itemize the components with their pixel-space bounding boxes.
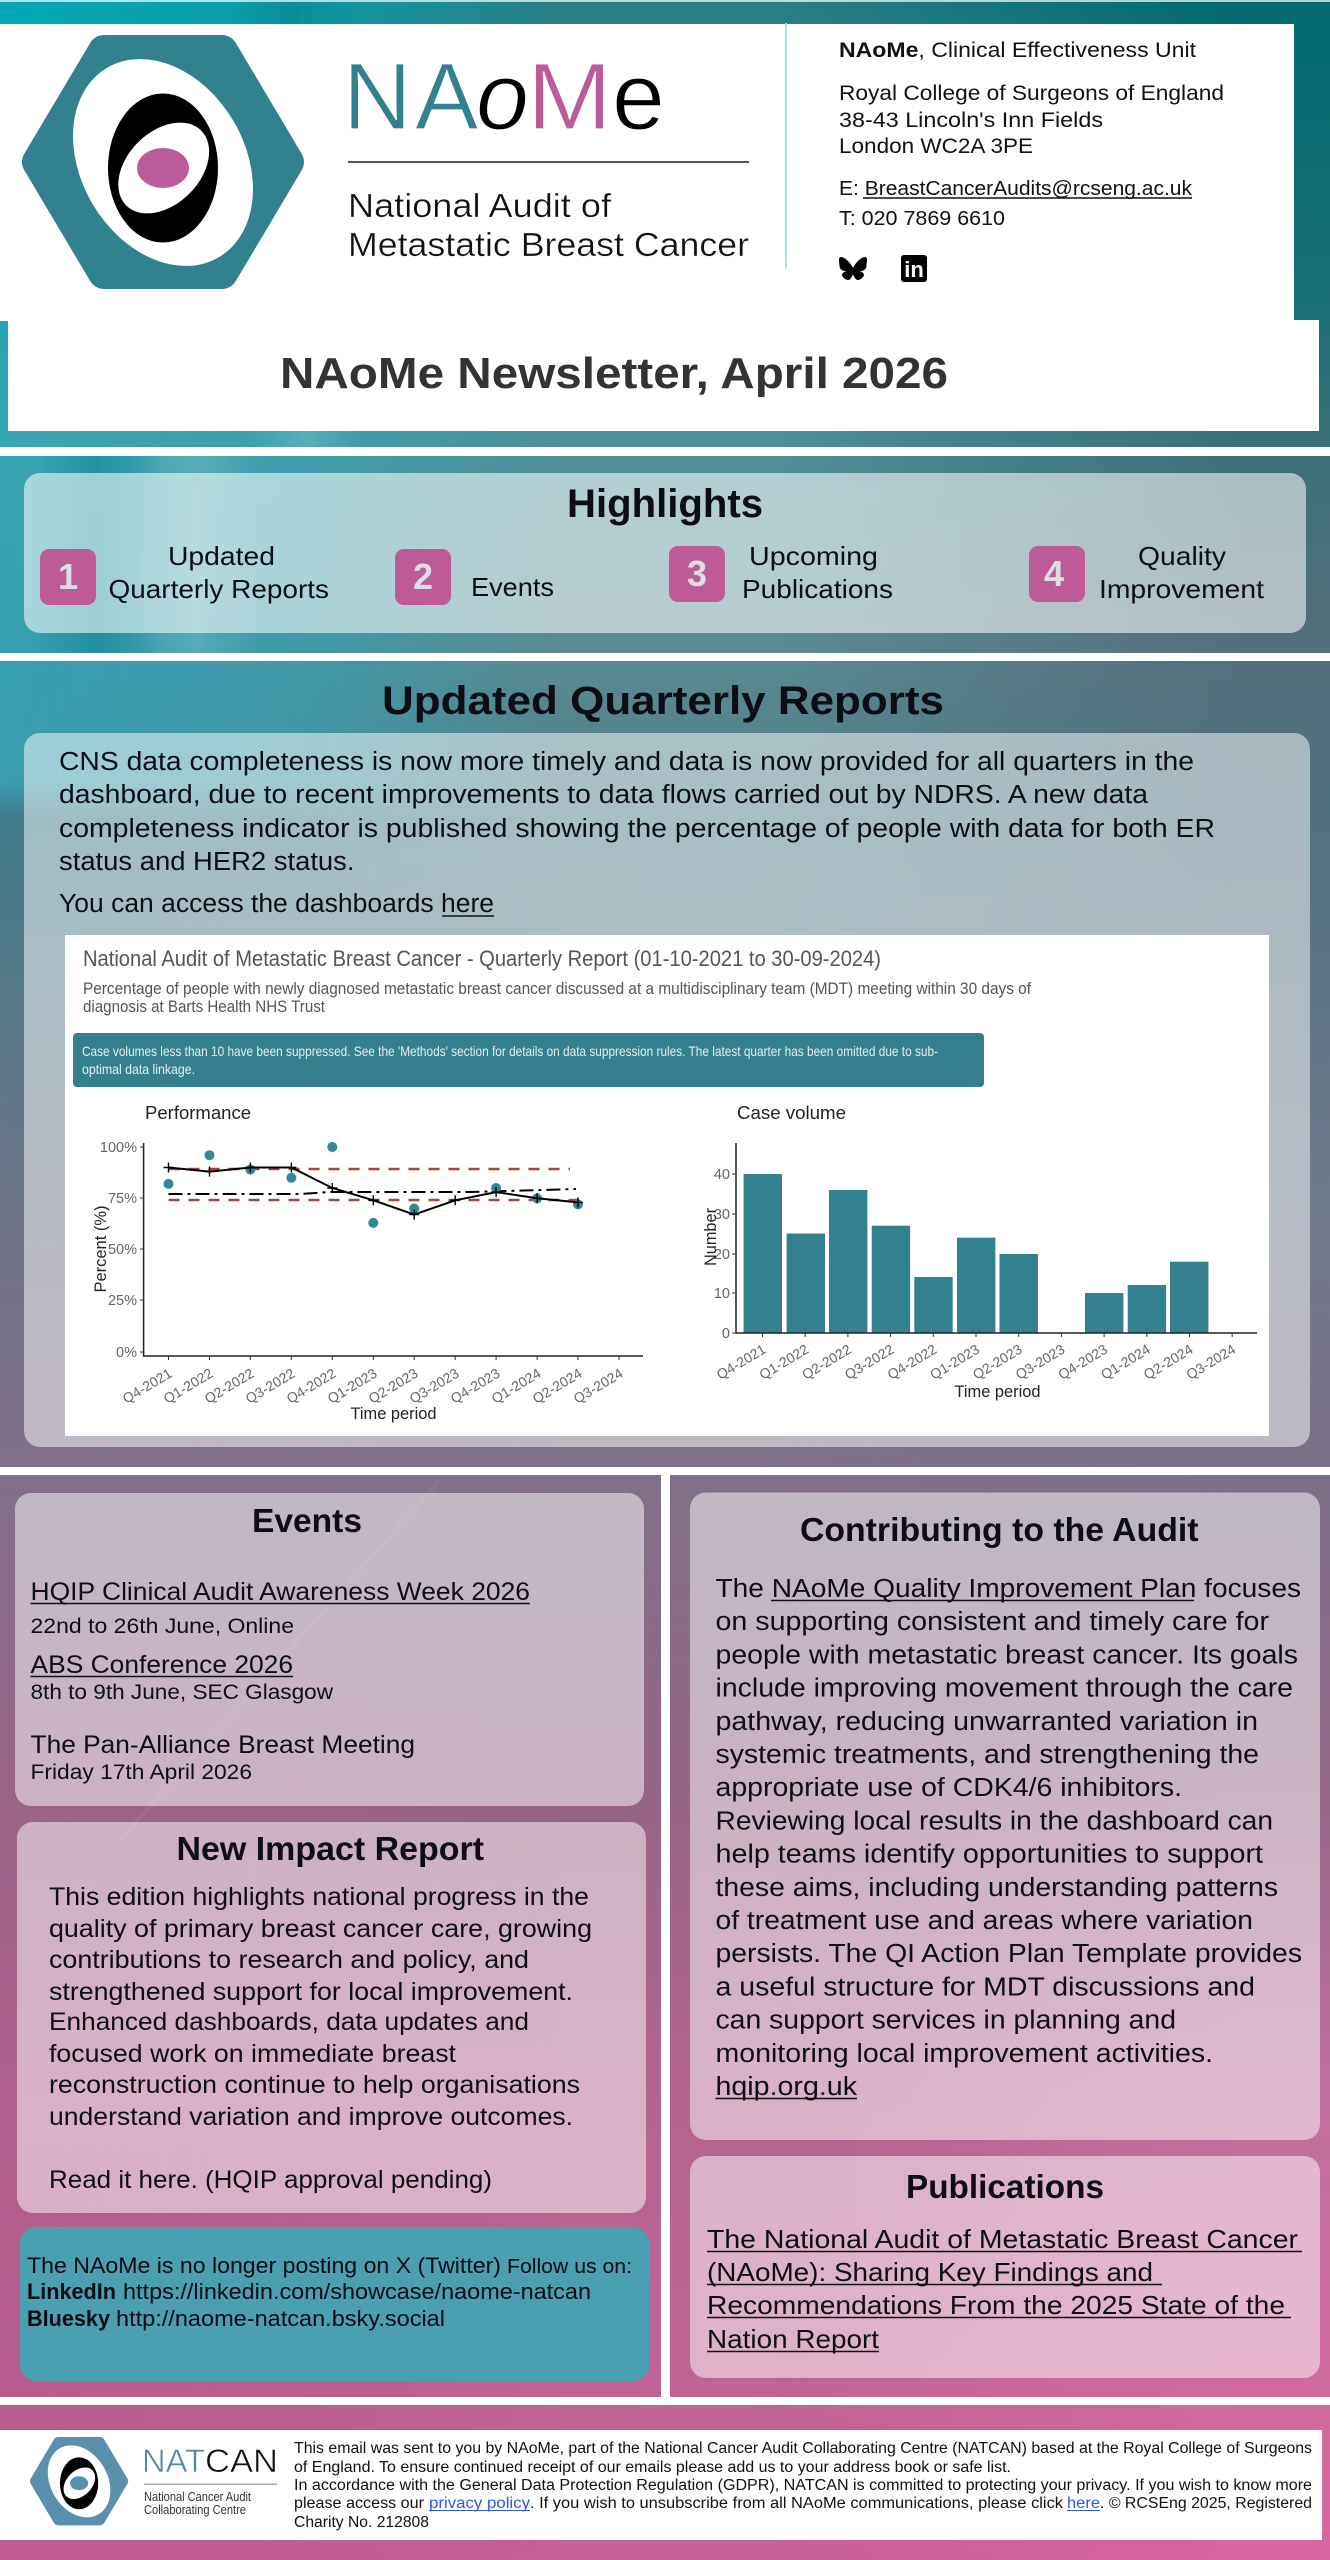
callout: social media notice: Bluesky — [27, 2306, 111, 2331]
line chart: performance: Q2-2024 — [530, 1365, 585, 1407]
wordmark: NATCAN: NAT — [142, 2443, 205, 2479]
text: contributing body: monitoring local improvement activities. — [716, 2040, 1213, 2068]
text: footer legal notice: please access our — [294, 2495, 424, 2512]
callout: social media notice: The NAoMe is no longer posting on X (Twitter) — [27, 2253, 501, 2278]
title banner: NAoMe Newsletter, April 2026 — [280, 349, 948, 398]
bar chart: case volume: 20 — [714, 1247, 730, 1263]
bar chart: case volume: Q3-2022 — [842, 1341, 897, 1383]
text: quarterly reports intro: status and HER2 status. — [59, 848, 354, 876]
text: contributing body: pathway, reducing unwarranted variation in — [716, 1708, 1258, 1736]
line chart: performance: 0% — [116, 1345, 137, 1361]
panel: contributing to the audit — [690, 1492, 1320, 2140]
line chart: performance: Q4-2022 — [284, 1365, 339, 1407]
highlight 4 — [1029, 541, 1265, 604]
logo subtitle — [348, 161, 749, 263]
dashboard title: Percentage of people with newly diagnosed metastatic breast cancer discussed at a multidisciplinary team (MDT) meeting within 30 days of — [83, 979, 1031, 998]
callout: suppression note: Case volumes less than 10 have been suppressed. See the 'Methods' section for details on data suppression rules. The latest quarter has been omitted due to sub- — [82, 1043, 938, 1059]
text: contributing body: Reviewing local results in the dashboard can — [716, 1807, 1273, 1835]
text: footer legal notice — [294, 2440, 1312, 2531]
highlight 2: 2 — [413, 556, 433, 597]
bar chart: case volume: 30 — [714, 1207, 730, 1223]
callout: social media notice: Follow us on: — [507, 2256, 632, 2278]
text: quarterly reports intro: dashboard, due to recent improvements to data flows carried out by NDRS. A new data — [59, 781, 1149, 809]
contact details: T: 020 7869 6610 — [839, 208, 1005, 230]
text: contributing body: appropriate use of CDK4/6 inhibitors. — [716, 1774, 1182, 1802]
text: contributing body: systemic treatments, and strengthening the — [716, 1741, 1259, 1769]
line chart: performance: Q3-2024 — [571, 1365, 626, 1407]
line chart: performance: Q2-2022 — [202, 1365, 257, 1407]
callout: social media notice: LinkedIn — [27, 2279, 116, 2304]
text: quarterly reports intro: You can access the dashboards here — [59, 890, 494, 918]
wordmark: NAoMe: e — [612, 44, 665, 150]
wordmark: NAoMe — [343, 44, 665, 150]
line chart: performance: 100% — [100, 1140, 137, 1156]
bar chart: case volume — [702, 1103, 1257, 1401]
wordmark: NATCAN — [142, 2443, 278, 2479]
text: footer legal notice: . © RCSEng 2025, Registered — [1100, 2495, 1312, 2512]
bar chart: case volume: Q4-2023 — [1055, 1341, 1110, 1383]
text: publication link: The National Audit of Metastatic Breast Cancer — [707, 2224, 1298, 2254]
icon: Bluesky — [839, 257, 867, 280]
line chart: performance: 50% — [108, 1242, 137, 1258]
text: contributing body: on supporting consistent and timely care for — [716, 1608, 1270, 1636]
heading: Events: Events — [252, 1502, 362, 1539]
heading: Publications: Publications — [906, 2168, 1104, 2205]
bar chart: case volume: 0 — [722, 1326, 730, 1342]
text: impact report body: Enhanced dashboards, data updates and — [49, 2008, 529, 2036]
panel: publications — [690, 2156, 1320, 2378]
dashboard screenshot — [65, 935, 1269, 1436]
heading: Highlights: Highlights — [567, 482, 763, 526]
heading: Updated Quarterly Reports: Updated Quarterly Reports — [382, 679, 944, 723]
text: publication link: Nation Report — [707, 2324, 880, 2354]
bar chart: case volume: Q1-2023 — [927, 1341, 982, 1383]
highlight 1: Quarterly Reports — [108, 574, 329, 604]
text: footer legal notice: . If you wish to unsubscribe from all NAoMe communications, please click — [530, 2495, 1063, 2512]
bar chart: case volume: Q1-2022 — [756, 1341, 811, 1383]
dashboard title — [83, 946, 1031, 1016]
highlight 2 — [395, 549, 554, 605]
line chart: performance: Q3-2022 — [243, 1365, 298, 1407]
text: footer legal notice: This email was sent to you by NAoMe, part of the National Cancer Audit Collaborating Centre (NATCAN) based at the Royal College of Surgeons — [294, 2440, 1312, 2457]
event: Pan-Alliance: Friday 17th April 2026 — [30, 1761, 252, 1784]
text: impact report body: This edition highlights national progress in the — [49, 1883, 589, 1911]
bar chart: case volume: Q4-2022 — [884, 1341, 940, 1383]
bar chart: case volume: 40 — [714, 1167, 730, 1183]
header panel — [0, 23, 1294, 321]
highlight 4: Improvement — [1099, 574, 1265, 604]
text: contributing body: these aims, including understanding patterns — [716, 1874, 1278, 1902]
callout: social media notice: https://linkedin.com/showcase/naome-natcan — [123, 2279, 591, 2304]
text: impact report body: reconstruction continue to help organisations — [49, 2071, 580, 2099]
text: quarterly reports intro: completeness indicator is published showing the percentage of people with data for both ER — [59, 815, 1215, 843]
text: impact report body: quality of primary breast cancer care, growing — [49, 1915, 592, 1943]
text: contributing body: include improving movement through the care — [716, 1675, 1293, 1703]
panel: footer — [0, 2430, 1322, 2540]
title banner — [8, 320, 1319, 431]
bar chart: case volume: 10 — [714, 1286, 730, 1302]
panel: quarterly reports — [24, 733, 1310, 1447]
event: Pan-Alliance: The Pan-Alliance Breast Meeting — [30, 1731, 415, 1759]
text: contributing body: of treatment use and areas where variation — [716, 1907, 1253, 1935]
bar chart: case volume: Q1-2024 — [1098, 1341, 1153, 1383]
icon: NATCAN logo — [35, 2434, 123, 2529]
text: footer legal notice: here — [1067, 2495, 1100, 2512]
event: ABS: ABS Conference 2026 — [30, 1651, 293, 1679]
line chart: performance: Q1-2023 — [325, 1365, 380, 1407]
dashboard title: National Audit of Metastatic Breast Cancer - Quarterly Report (01-10-2021 to 30-09-2024) — [83, 946, 881, 971]
line chart: performance: Percent (%) — [92, 1206, 110, 1292]
text: contributing body: people with metastatic breast cancer. Its goals — [716, 1641, 1298, 1669]
highlight 2: Events — [471, 572, 554, 602]
wordmark: NAoMe: N — [343, 44, 412, 150]
wordmark: NAoMe: A — [415, 44, 479, 150]
contact details: 38-43 Lincoln's Inn Fields — [839, 109, 1103, 132]
line chart: performance: Time period — [350, 1405, 436, 1423]
line chart: performance: Q2-2023 — [366, 1365, 421, 1407]
highlight 1: Updated — [168, 541, 275, 571]
text: publication link: (NAoMe): Sharing Key Findings and — [707, 2257, 1153, 2287]
text: impact report body: understand variation and improve outcomes. — [49, 2103, 573, 2131]
highlight 3: Publications — [742, 574, 893, 604]
contact details: E: BreastCancerAudits@rcseng.ac.uk — [839, 178, 1193, 200]
text: contributing body: hqip.org.uk — [716, 2073, 857, 2101]
dashboard title: diagnosis at Barts Health NHS Trust — [83, 997, 325, 1016]
wordmark: NAoMe: o — [476, 44, 529, 150]
wordmark: NATCAN: CAN — [205, 2443, 278, 2479]
line chart: performance: 75% — [108, 1191, 137, 1207]
highlight 4: Quality — [1138, 541, 1226, 571]
bar chart: case volume: Q3-2024 — [1183, 1341, 1238, 1383]
line chart: performance: Q1-2022 — [161, 1365, 216, 1407]
text: publication link — [707, 2224, 1302, 2354]
highlight 3: 3 — [687, 553, 707, 594]
text: impact report body — [49, 1883, 592, 2194]
bar chart: case volume: Case volume — [737, 1103, 846, 1123]
line chart: performance: Q4-2021 — [120, 1365, 175, 1407]
text: impact report body: Read it here. (HQIP approval pending) — [49, 2166, 492, 2194]
line chart: performance — [92, 1103, 643, 1423]
logo subtitle: Metastatic Breast Cancer — [348, 226, 749, 263]
event: ABS: 8th to 9th June, SEC Glasgow — [30, 1681, 334, 1704]
contact details: NAoMe , Clinical Effectiveness Unit — [839, 39, 1196, 62]
highlight 3 — [669, 541, 893, 604]
text: contributing body — [716, 1575, 1302, 2101]
text: contributing body: The NAoMe Quality Improvement Plan focuses — [716, 1575, 1301, 1603]
line chart: performance: Performance — [145, 1103, 251, 1123]
callout: social media notice: http://naome-natcan.bsky.social — [116, 2306, 445, 2331]
text: quarterly reports intro — [59, 748, 1215, 918]
heading: New Impact Report: New Impact Report — [176, 1830, 484, 1867]
highlight 1: 1 — [58, 556, 78, 597]
text: contributing body: persists. The QI Action Plan Template provides — [716, 1940, 1302, 1968]
event: HQIP — [30, 1578, 530, 1638]
panel: events — [15, 1493, 644, 1806]
event: Pan-Alliance — [30, 1731, 415, 1784]
line chart: performance: Q3-2023 — [407, 1365, 462, 1407]
contact details — [839, 39, 1224, 230]
highlight 4: 4 — [1044, 553, 1064, 594]
icon: NAoMe logo — [37, 26, 289, 299]
logo subtitle: National Audit of — [348, 187, 612, 224]
event: ABS — [30, 1651, 334, 1704]
event: HQIP: HQIP Clinical Audit Awareness Week 2026 — [30, 1578, 530, 1606]
NATCAN subtitle: Collaborating Centre — [144, 2503, 246, 2517]
text: quarterly reports intro: CNS data completeness is now more timely and data is now provided for all quarters in the — [59, 748, 1194, 776]
highlight 1 — [40, 541, 329, 605]
highlight 3: Upcoming — [749, 541, 878, 571]
event: HQIP: 22nd to 26th June, Online — [30, 1615, 294, 1638]
bar chart: case volume: Q2-2023 — [970, 1341, 1025, 1383]
bar chart: case volume: Q2-2024 — [1141, 1341, 1196, 1383]
text: impact report body: focused work on immediate breast — [49, 2040, 456, 2068]
callout: suppression note — [73, 1033, 984, 1087]
text: publication link: Recommendations From the 2025 State of the — [707, 2290, 1285, 2320]
text: footer legal notice: In accordance with the General Data Protection Regulation (GDPR), NATCAN is committed to protecting your privacy. If you wish to know more — [294, 2477, 1312, 2494]
panel: new impact report — [17, 1822, 646, 2213]
text: impact report body: contributions to research and policy, and — [49, 1946, 529, 1974]
icon: LinkedIn: in — [904, 257, 924, 282]
icon: LinkedIn — [901, 255, 927, 282]
NATCAN subtitle: National Cancer Audit — [144, 2490, 251, 2504]
text: footer legal notice: Charity No. 212808 — [294, 2514, 429, 2531]
line chart: performance: 25% — [108, 1293, 137, 1309]
bar chart: case volume: Number — [702, 1208, 720, 1266]
text: contributing body: a useful structure for MDT discussions and — [716, 1973, 1255, 2001]
contact details: Royal College of Surgeons of England — [839, 82, 1224, 105]
text: impact report body: strengthened support for local improvement. — [49, 1978, 573, 2006]
bar chart: case volume: Time period — [954, 1383, 1040, 1401]
bar chart: case volume: Q4-2021 — [714, 1341, 769, 1383]
bar chart: case volume: Q3-2023 — [1013, 1341, 1068, 1383]
contact details: London WC2A 3PE — [839, 135, 1033, 158]
line chart: performance: Q4-2023 — [448, 1365, 503, 1407]
panel: highlights — [24, 473, 1306, 633]
text: footer legal notice: of England. To ensure continued receipt of our emails please add us to your address book or safe list. — [294, 2459, 1011, 2476]
wordmark: NAoMe: M — [527, 44, 612, 150]
text: footer legal notice: privacy policy — [429, 2495, 530, 2512]
heading: Contributing to the Audit: Contributing to the Audit — [800, 1511, 1199, 1548]
line chart: performance: Q1-2024 — [489, 1365, 544, 1407]
bar chart: case volume: Q2-2022 — [799, 1341, 854, 1383]
text: contributing body: help teams identify opportunities to support — [716, 1841, 1263, 1869]
NATCAN subtitle — [144, 2484, 277, 2517]
callout: social media notice — [20, 2227, 649, 2381]
callout: suppression note: optimal data linkage. — [82, 1061, 195, 1077]
text: contributing body: can support services in planning and — [716, 2007, 1176, 2035]
